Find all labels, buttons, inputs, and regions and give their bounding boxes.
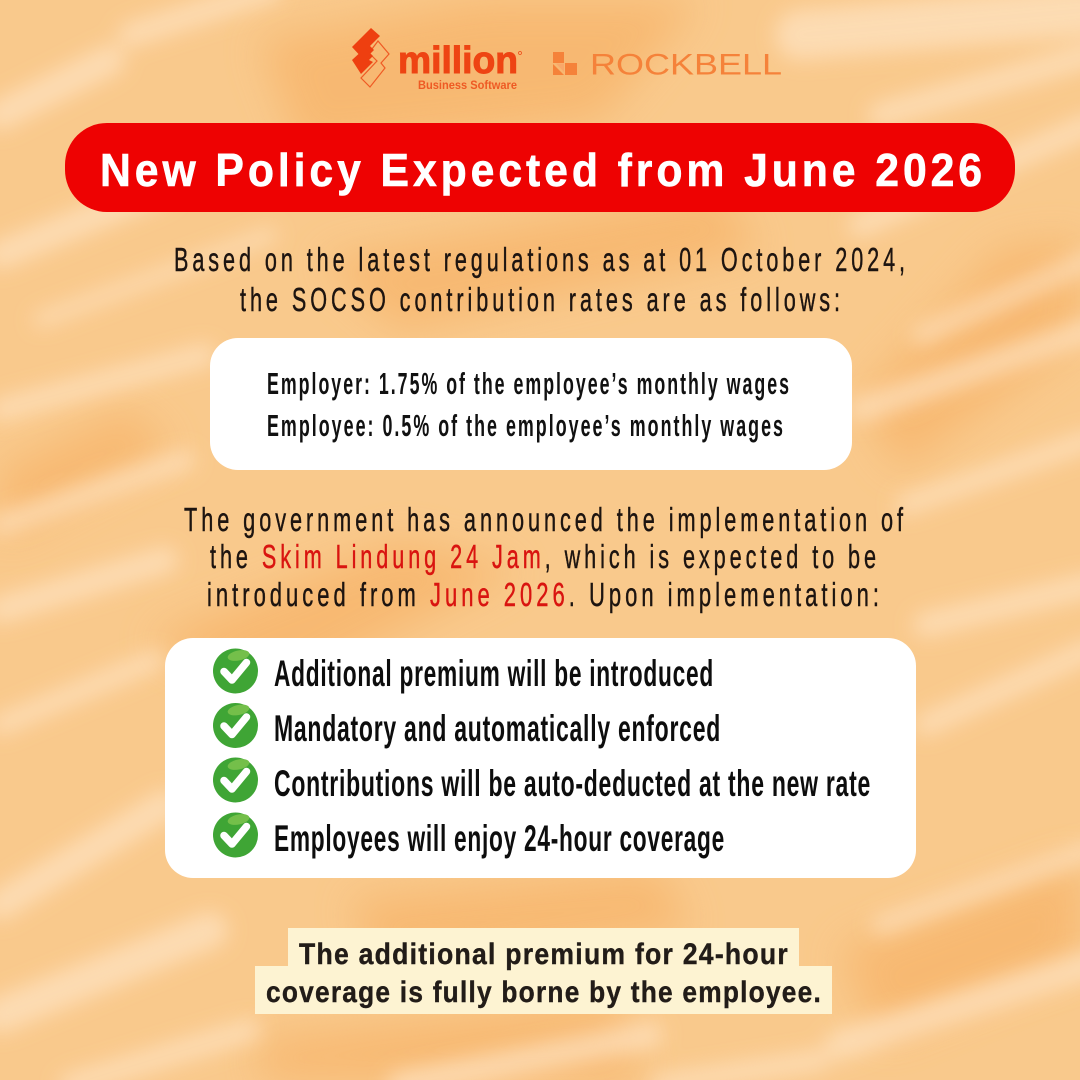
wordmark: ROCKBELL: ROCKBELL: [590, 48, 782, 82]
text block: Skim Lindung 24 Jam announcement: [184, 501, 907, 613]
panel: contribution rates: [210, 338, 852, 470]
checklist item 1: Additional premium will be introduced: [274, 653, 714, 694]
logo: Rockbell: [553, 48, 782, 82]
panel: implementation checklist: [165, 638, 916, 878]
callout: employee bears premium: The additional premium for 24-hour: [299, 938, 789, 971]
checklist item 2: [213, 703, 721, 749]
tagline: Business Software: Business Software: [418, 78, 517, 92]
checklist item 2: Mandatory and automatically enforced: [274, 708, 721, 749]
title banner: [65, 123, 1015, 212]
callout: employee bears premium: [255, 928, 832, 1014]
checklist item 3: [213, 757, 871, 804]
checklist item 1: [213, 648, 714, 694]
icon: million stacked diamond mark: [352, 28, 389, 87]
wordmark: million: million: [398, 40, 518, 82]
checklist item 4: Employees will enjoy 24-hour coverage: [274, 818, 725, 859]
text block: Skim Lindung 24 Jam announcement: introduced from June 2026. Upon implementation:: [207, 576, 883, 613]
title text: New Policy Expected from June 2026: [100, 144, 986, 196]
text block: current regulations intro: [174, 241, 909, 318]
logo: million Business Software: [352, 28, 522, 92]
icon: Rockbell squares: [553, 52, 577, 75]
callout: employee bears premium: coverage is fully borne by the employee.: [266, 976, 822, 1009]
checklist item 4: [213, 812, 725, 859]
text block: Skim Lindung 24 Jam announcement: the Skim Lindung 24 Jam, which is expected to be: [210, 538, 880, 575]
